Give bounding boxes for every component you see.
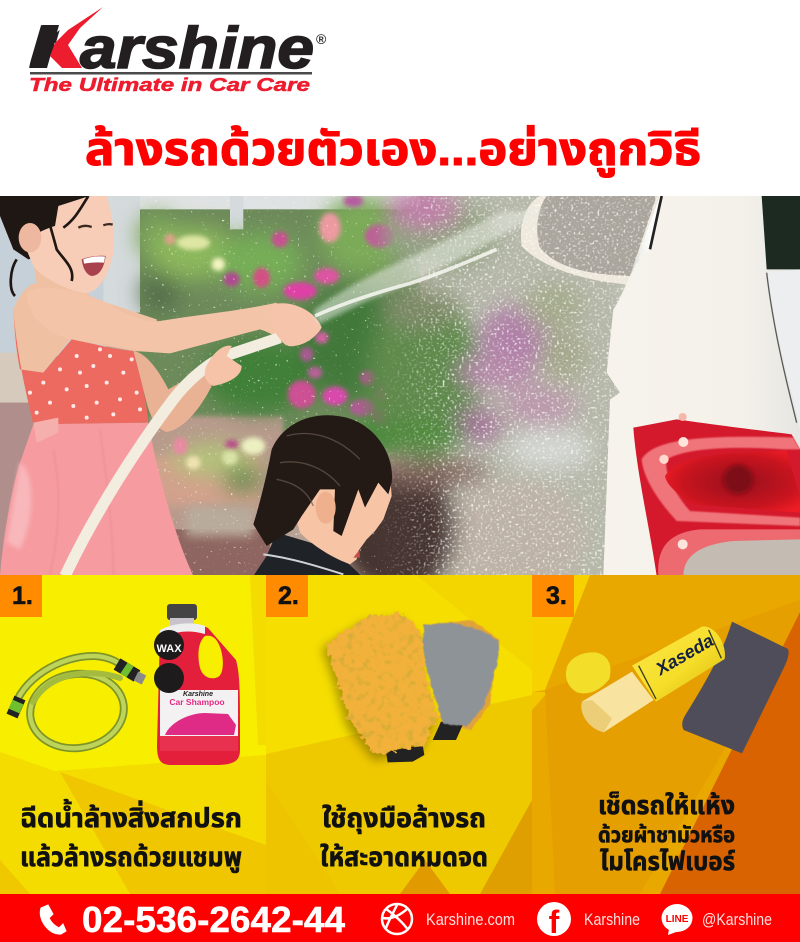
footer bar <box>0 894 800 942</box>
text: step 3: ไมโครไฟเบอร์ <box>600 846 735 876</box>
logo: Karshine <box>28 7 327 95</box>
girl: dress skirt <box>0 423 193 576</box>
icon: chamois tube and microfiber towel: Xaseda <box>651 630 717 680</box>
text: step 3: ด้วยผ้าชามัวหรือ <box>598 824 735 847</box>
chamois <box>582 672 654 732</box>
badge: 3: 3. <box>546 582 567 610</box>
badge: 2: 2. <box>278 582 299 610</box>
text: step 1 <box>20 799 242 873</box>
wing mirror <box>521 196 660 284</box>
panel: step 1 background <box>0 575 266 894</box>
hose <box>65 338 280 576</box>
icon: phone <box>40 905 66 934</box>
photo background right <box>357 176 660 596</box>
girl: dress bodice <box>13 309 148 424</box>
icon: garden hose <box>12 656 144 754</box>
towel <box>682 622 789 753</box>
phone number: 02-536-2642-44 <box>82 899 345 940</box>
icon: LINE <box>662 904 692 935</box>
boy: ear <box>316 492 336 524</box>
text: step 3 <box>598 790 735 876</box>
text: step 2: ใช้ถุงมือล้างรถ <box>322 803 486 834</box>
text: step 3: เช็ดรถให้แห้ง <box>598 790 735 820</box>
icon: wash mitts <box>322 613 499 762</box>
icon: shampoo bottle <box>154 604 240 765</box>
icon: LINE: LINE <box>666 914 689 925</box>
icon: facebook: f <box>549 904 560 940</box>
front mitt <box>324 613 438 755</box>
car <box>603 196 800 576</box>
girl and boy <box>0 196 547 576</box>
logo: Karshine: arshine <box>80 16 314 81</box>
water droplets sparse <box>140 196 390 575</box>
flowers <box>165 195 400 469</box>
girl: neck and shoulder <box>13 263 160 373</box>
badge: 1 <box>0 575 42 617</box>
boy: shirt <box>253 533 362 576</box>
girl: face <box>25 196 114 293</box>
logo: Karshine: ® <box>316 31 327 47</box>
shadow <box>322 619 435 761</box>
logo: Karshine: The Ultimate in Car Care <box>29 75 310 95</box>
badge: 2 <box>266 575 308 617</box>
girl: hair back <box>0 196 90 259</box>
boy: hair <box>253 415 392 546</box>
tube <box>632 627 725 702</box>
girl: far arm <box>133 351 212 432</box>
cap <box>566 652 611 693</box>
icon: facebook <box>537 902 571 940</box>
LINE account: @Karshine <box>702 910 772 929</box>
boy: face <box>298 482 392 564</box>
website: Karshine.com <box>426 910 515 929</box>
cuff <box>386 745 424 762</box>
water jet <box>313 209 547 324</box>
tail light <box>633 419 800 576</box>
icon: shampoo bottle: Car Shampoo <box>169 697 225 707</box>
girl: near arm <box>103 301 287 354</box>
text: step 1: แล้วล้างรถด้วยแชมพู <box>20 842 242 873</box>
badge: 3 <box>532 575 574 617</box>
icon: shampoo bottle: Karshine <box>183 691 213 698</box>
panel: step 2 background <box>266 575 532 894</box>
back mitt <box>424 620 499 730</box>
icon: shampoo bottle: WAX <box>156 643 182 655</box>
facebook name: Karshine <box>584 910 640 929</box>
icon: website <box>382 904 412 934</box>
badge: 1: 1. <box>12 582 33 610</box>
text: step 2 <box>320 803 488 872</box>
photo: children spraying water on a white car <box>0 176 800 596</box>
text: step 2: ให้สะอาดหมดจด <box>320 842 488 872</box>
photo background left <box>0 195 437 586</box>
foliage <box>137 196 437 586</box>
text: step 1: ฉีดน้ำล้างสิ่งสกปรก <box>20 799 242 833</box>
title: ล้างรถด้วยตัวเอง...อย่างถูกวิธี <box>85 123 701 177</box>
logo: Karshine: K <box>28 13 77 82</box>
panel: step 3 background <box>532 575 800 894</box>
icon: chamois tube and microfiber towel <box>566 622 789 753</box>
water droplets dense <box>380 196 660 575</box>
